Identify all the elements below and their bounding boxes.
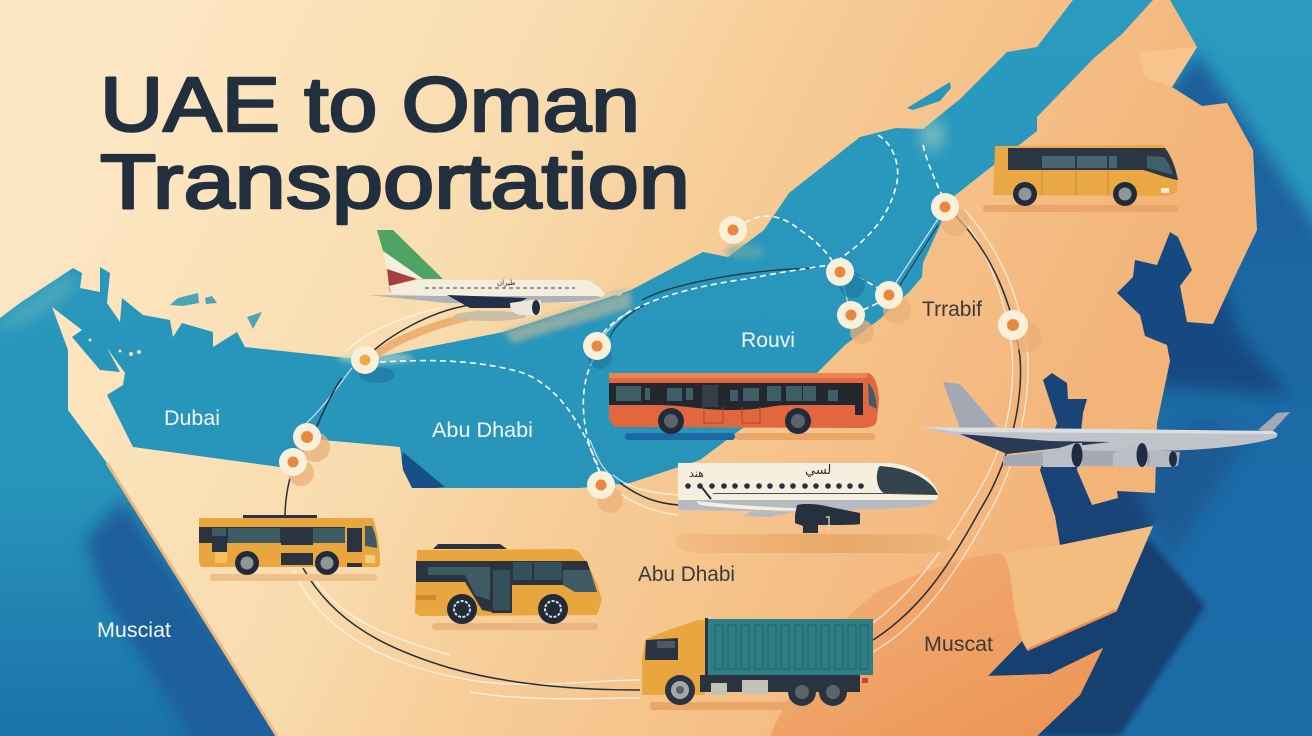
vehicle: centre aircraft fuselage <box>675 462 951 553</box>
vehicle: top plane with green tail <box>368 230 627 321</box>
title <box>100 62 690 225</box>
place labels: Muscat <box>924 633 993 656</box>
vehicle: lower yellow bus <box>415 544 602 630</box>
place labels: Musciat <box>97 619 171 642</box>
vehicle: top plane with green tail: طيران <box>497 280 516 287</box>
vehicle: centre aircraft fuselage: هند <box>689 468 704 480</box>
place labels: Rouvi <box>741 329 795 352</box>
place labels: Dubai <box>164 407 220 430</box>
vehicle: container truck <box>642 618 873 710</box>
place labels: Abu Dhabi <box>638 563 735 586</box>
route lines <box>285 135 1028 699</box>
plane shadow arc (orange) <box>372 314 480 358</box>
vehicle: left yellow bus <box>199 515 380 581</box>
route nodes <box>279 193 1042 513</box>
vehicle: orange bus <box>609 373 879 440</box>
vehicle: right airliner <box>920 382 1290 467</box>
place labels: Trrabif <box>922 298 982 321</box>
vehicle: top right yellow bus <box>983 145 1178 212</box>
title: UAE to Oman <box>100 62 640 148</box>
map: northern land (top left) <box>0 0 1073 358</box>
place labels <box>97 298 993 656</box>
place labels: Abu Dhabi <box>432 419 533 442</box>
vehicle: centre aircraft fuselage: لسي <box>805 462 831 477</box>
title: Transportation <box>100 139 690 225</box>
map: foam, islands and coast details <box>0 82 951 364</box>
